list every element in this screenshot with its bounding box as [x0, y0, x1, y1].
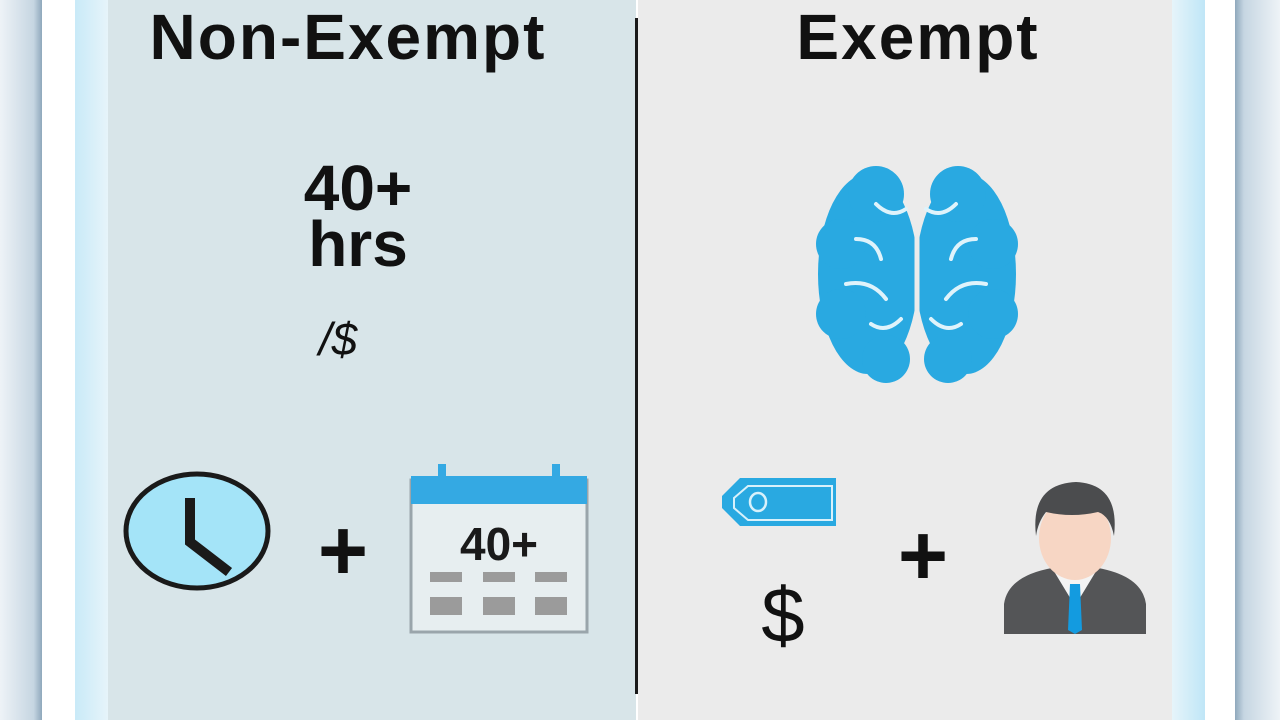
heading: Exempt: Exempt — [796, 1, 1040, 73]
text: 40+ hrs: hrs — [308, 208, 408, 280]
text: /$: /$ — [319, 313, 357, 365]
panel: non-exempt — [108, 0, 636, 720]
icon: calendar 40+ — [410, 464, 588, 634]
icon: businessman — [1004, 482, 1146, 634]
icon: calendar 40+: 40+ — [460, 518, 538, 570]
text: 40+ hrs — [304, 152, 412, 280]
text: 40+ hrs: 40+ — [304, 152, 412, 224]
icon: plus: + — [318, 503, 368, 599]
icon: brain — [816, 166, 1018, 383]
icon: price tag — [722, 478, 836, 526]
icon: clock — [124, 472, 270, 590]
text: $: $ — [761, 571, 805, 659]
icon: plus: + — [898, 508, 948, 604]
divider — [635, 18, 638, 694]
panel: exempt — [638, 0, 1172, 720]
heading: Non-Exempt: Non-Exempt — [150, 1, 546, 73]
